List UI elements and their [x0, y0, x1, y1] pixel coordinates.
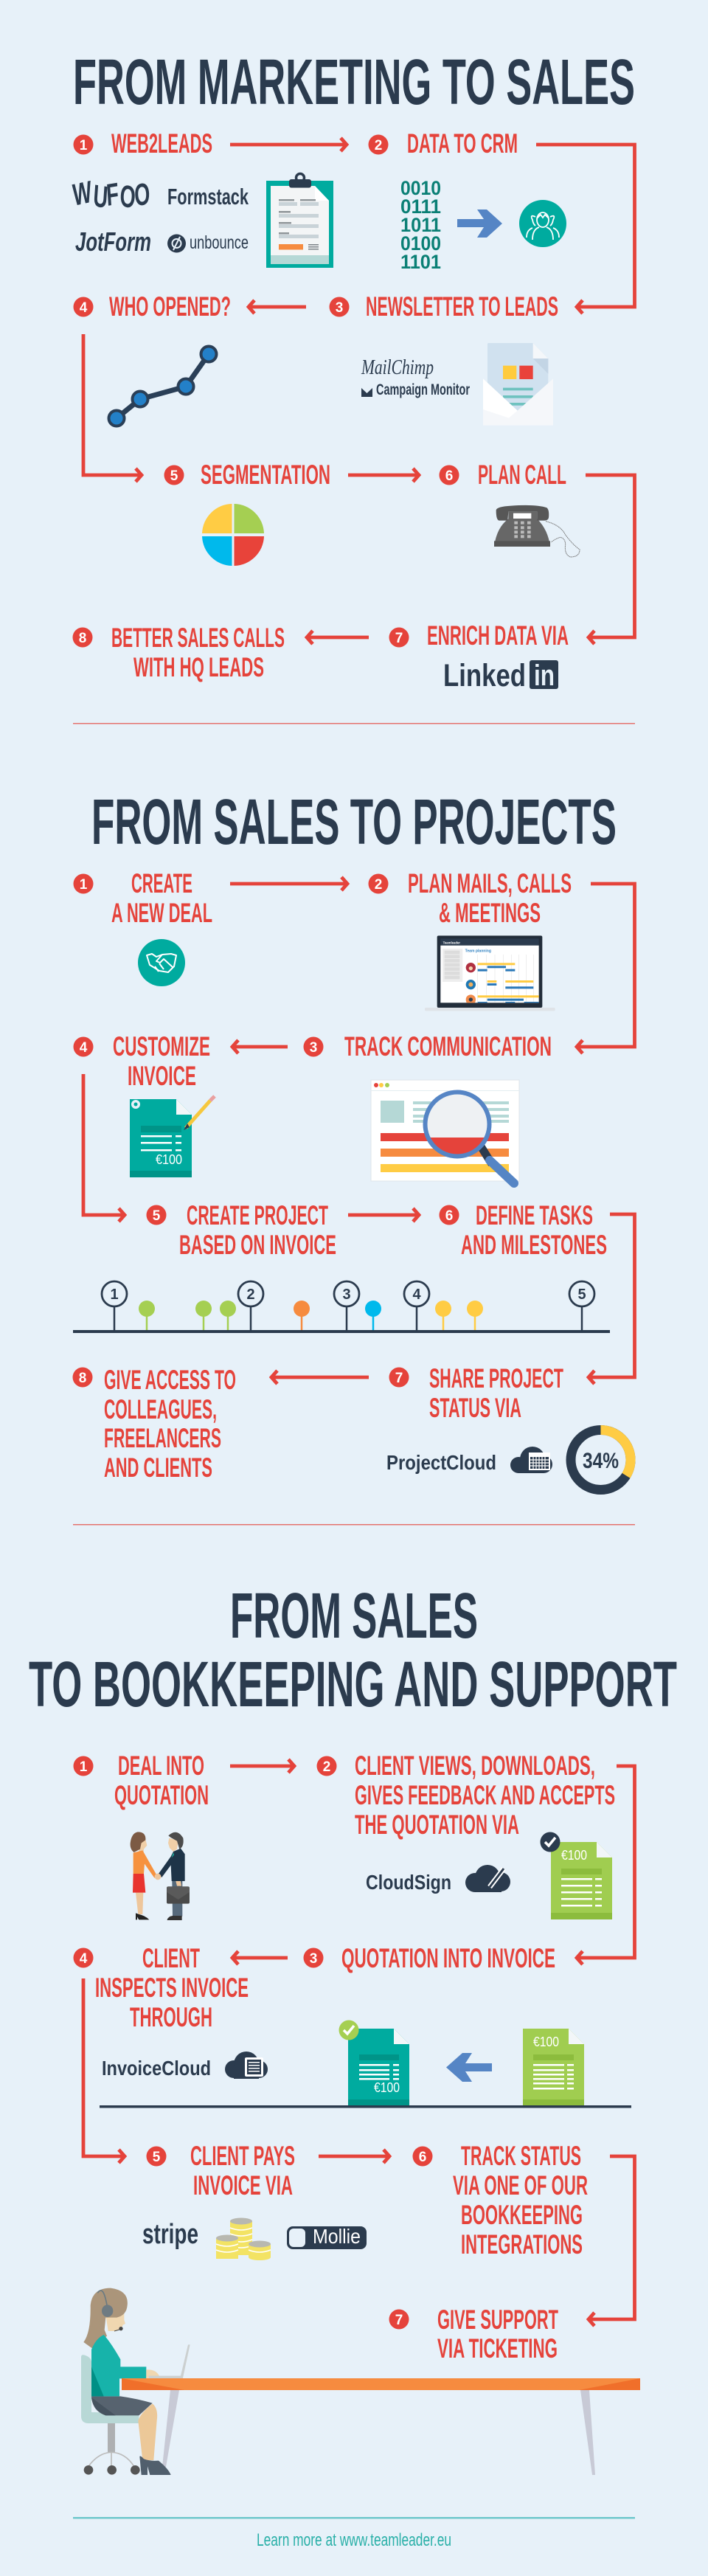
step 7: share project status: 7	[395, 1371, 403, 1386]
icon: green quotation	[523, 2029, 584, 2105]
form tool logos: WUFOO	[70, 176, 151, 214]
logo: projectcloud	[386, 1447, 552, 1474]
logo: mollie toggle	[287, 2225, 367, 2249]
icon: contacts circle	[519, 200, 566, 247]
step 1: create a new deal	[74, 868, 212, 928]
step 8: better sales calls	[72, 622, 285, 682]
step 7: share project status	[389, 1363, 563, 1423]
step 4: customize invoice: CUSTOMIZE	[113, 1031, 210, 1062]
chart: 34 percent donut: 34%	[583, 1449, 619, 1473]
step 6: define tasks: 6	[445, 1208, 453, 1224]
form tool logos	[70, 176, 249, 257]
logo: linkedin: in	[534, 659, 555, 692]
step 5: client pays invoice: 5	[153, 2150, 161, 2165]
step 3: newsletter to leads	[329, 291, 558, 322]
step 5: client pays invoice: CLIENT PAYS	[190, 2140, 295, 2171]
step 1: deal into quotation: DEAL INTO	[118, 1750, 204, 1781]
arrow: step 1 to 2	[230, 877, 347, 890]
arrow: step 5 to 6	[319, 2150, 389, 2163]
chair	[81, 2355, 140, 2475]
arrow: step 3 to 4	[232, 1040, 288, 1053]
title: from sales to bookkeeping and support: FROM SALES	[230, 1580, 478, 1652]
arrow: step 7 to 8	[307, 631, 369, 644]
step 5: create project: BASED ON INVOICE	[179, 1229, 336, 1260]
arrow: step 7 to 8	[271, 1371, 369, 1384]
step 6: define tasks	[440, 1199, 607, 1260]
step 3: quotation into invoice: QUOTATION INTO INVOICE	[341, 1942, 555, 1973]
step 4: customize invoice: 4	[80, 1040, 88, 1056]
icon: telephone	[494, 505, 580, 557]
step 3: newsletter to leads: 3	[336, 300, 343, 316]
timeline chart: 1	[110, 1287, 119, 1303]
step 7: give support: 7	[395, 2313, 403, 2328]
step 7: give support: GIVE SUPPORT	[437, 2304, 558, 2335]
step 5: client pays invoice: INVOICE VIA	[193, 2170, 293, 2201]
step 1: web2leads: 1	[80, 138, 88, 153]
step 2: plan mails calls and meetings: PLAN MAILS, CALLS	[408, 868, 572, 899]
step 2: data to crm: 2	[375, 138, 382, 153]
step 8: give access: COLLEAGUES,	[104, 1393, 217, 1424]
step 6: plan call	[440, 459, 566, 490]
step 4: client inspects invoice: CLIENT	[142, 1942, 200, 1973]
step 8: give access	[72, 1364, 236, 1483]
arrow: step 4 to 5	[83, 1978, 125, 2163]
step 2: client views	[317, 1750, 615, 1840]
arrow: step 4 to 5	[83, 334, 142, 482]
binary digits: 1011	[400, 214, 441, 236]
panel: from marketing to sales	[70, 46, 635, 693]
step 4: client inspects invoice: INSPECTS INVOICE	[95, 1972, 249, 2003]
icon: laptop with team planning: Teamleader	[443, 941, 460, 945]
step 2: client views: THE QUOTATION VIA	[355, 1809, 519, 1840]
step 1: create a new deal: 1	[80, 877, 88, 893]
step 8: give access: FREELANCERS	[104, 1422, 221, 1453]
icon: teal invoice with check	[339, 2020, 409, 2105]
timeline chart: 3	[342, 1287, 351, 1303]
step 2: data to crm: DATA TO CRM	[407, 128, 518, 159]
arrow: step 2 to 3	[577, 884, 634, 1053]
binary digits	[400, 177, 441, 273]
icon: open envelope	[483, 343, 553, 426]
step 6: track status	[413, 2140, 588, 2260]
step 2: plan mails calls and meetings	[369, 868, 572, 928]
arrow: step 5 to 6	[348, 468, 419, 482]
logo: linkedin: Linked	[443, 658, 526, 693]
timeline chart: 4	[412, 1287, 421, 1303]
step 2: data to crm	[369, 128, 518, 159]
timeline chart	[73, 1281, 610, 1333]
step 7: enrich data via: 7	[395, 631, 403, 646]
step 4: customize invoice	[74, 1031, 210, 1091]
step 4: who opened: WHO OPENED?	[109, 291, 231, 322]
step 1: web2leads: WEB2LEADS	[111, 128, 212, 159]
step 1: deal into quotation	[74, 1750, 209, 1810]
arrow: step 3 to 4	[232, 1951, 288, 1964]
logo: invoicecloud: InvoiceCloud	[102, 2057, 211, 2080]
logo: invoicecloud	[102, 2052, 268, 2080]
step 6: track status: BOOKKEEPING	[461, 2199, 583, 2230]
step 1: deal into quotation: QUOTATION	[114, 1779, 209, 1810]
icon: line chart	[109, 347, 217, 426]
step 8: better sales calls: BETTER SALES CALLS	[111, 622, 285, 653]
step 3: newsletter to leads: NEWSLETTER TO LEADS	[366, 291, 558, 322]
icon: coin stacks	[216, 2217, 271, 2260]
step 7: give support	[389, 2304, 558, 2364]
desk leg left	[162, 2390, 179, 2467]
step 5: create project: CREATE PROJECT	[187, 1199, 328, 1230]
step 7: share project status: SHARE PROJECT	[429, 1363, 563, 1393]
step 6: track status: VIA ONE OF OUR	[453, 2170, 588, 2201]
step 3: track communication	[304, 1031, 552, 1062]
step 8: better sales calls: 8	[79, 631, 86, 646]
step 1: create a new deal: CREATE	[131, 868, 192, 899]
step 4: customize invoice: INVOICE	[128, 1060, 196, 1091]
step 6: track status: TRACK STATUS	[461, 2140, 581, 2171]
illustration: support agent at desk	[81, 2288, 640, 2475]
step 2: client views: 2	[323, 1759, 330, 1775]
step 4: client inspects invoice: THROUGH	[130, 2001, 212, 2032]
logo: cloudsign	[366, 1865, 510, 1894]
step 6: define tasks: DEFINE TASKS	[476, 1199, 593, 1230]
icon: green quotation with check: €100	[561, 1848, 587, 1863]
step 4: client inspects invoice	[74, 1942, 249, 2032]
logo: mollie toggle: Mollie	[313, 2225, 361, 2248]
timeline chart: 2	[246, 1287, 255, 1303]
icon: teal invoice with check: €100	[374, 2080, 400, 2095]
step 3: quotation into invoice: 3	[310, 1951, 317, 1967]
arrow: step 6 to 7	[586, 475, 634, 644]
desk leg right	[580, 2390, 595, 2475]
icon: blue arrow left	[446, 2053, 492, 2082]
agent figure	[83, 2288, 190, 2475]
panel: from sales to bookkeeping and support	[29, 1580, 677, 2475]
binary digits: 0100	[400, 232, 441, 255]
icon: teal invoice with pencil	[130, 1096, 215, 1177]
arrow: step 2 to 3	[577, 1766, 634, 1964]
icon: clipboard form	[266, 174, 333, 268]
binary digits: 0111	[400, 195, 441, 218]
step 3: quotation into invoice	[304, 1942, 555, 1973]
step 5: segmentation	[164, 459, 330, 490]
icon: green quotation with check	[540, 1832, 612, 1919]
arrow: step 1 to 2	[230, 1759, 294, 1773]
step 4: who opened: 4	[80, 300, 88, 316]
step 5: create project: 5	[153, 1208, 161, 1224]
form tool logos: unbounce	[190, 232, 249, 253]
arrow: step 1 to 2	[230, 138, 347, 151]
step 7: share project status: STATUS VIA	[429, 1392, 521, 1423]
step 7: enrich data via	[389, 620, 569, 651]
step 8: give access: GIVE ACCESS TO	[104, 1364, 236, 1395]
icon: handshake	[138, 939, 185, 986]
title: from sales to bookkeeping and support	[29, 1580, 677, 1720]
step 4: who opened	[74, 291, 231, 322]
chart: 34 percent donut	[571, 1430, 631, 1490]
icon: document with magnifier	[371, 1080, 519, 1183]
step 2: plan mails calls and meetings: & MEETINGS	[439, 897, 541, 928]
step 6: plan call: 6	[445, 468, 453, 484]
icon: laptop with team planning: Team planning	[465, 949, 491, 954]
form tool logos: Formstack	[167, 184, 249, 210]
step 5: client pays invoice	[146, 2140, 295, 2201]
binary digits: 0010	[400, 177, 441, 199]
arrow: step 4 to 5	[83, 1074, 125, 1222]
step 1: create a new deal: A NEW DEAL	[111, 897, 212, 928]
icon: laptop with team planning	[425, 935, 555, 1011]
footer: learn more: Learn more at www.teamleader.eu	[257, 2530, 451, 2550]
step 8: give access: AND CLIENTS	[104, 1452, 212, 1483]
step 6: plan call: PLAN CALL	[478, 459, 566, 490]
email tool logos: MailChimp	[361, 356, 434, 379]
step 7: enrich data via: ENRICH DATA VIA	[427, 620, 569, 651]
step 4: client inspects invoice: 4	[80, 1951, 88, 1967]
email tool logos	[361, 356, 470, 398]
icon: teal invoice with pencil: €100	[156, 1152, 182, 1167]
icon: blue arrow	[457, 210, 502, 238]
arrow: step 2 to 3	[536, 145, 634, 314]
step 5: create project	[146, 1199, 336, 1260]
step 5: segmentation: SEGMENTATION	[201, 459, 330, 490]
step 3: track communication: 3	[310, 1040, 317, 1056]
panel: from sales to projects	[72, 786, 634, 1490]
arrow: step 6 to 7	[589, 1214, 634, 1384]
binary digits: 1101	[400, 251, 441, 273]
desk top	[122, 2378, 640, 2390]
step 6: track status: 6	[419, 2150, 426, 2165]
arrow: step 5 to 6	[348, 1208, 419, 1222]
timeline chart: 5	[577, 1287, 586, 1303]
icon: green quotation: €100	[533, 2035, 559, 2049]
step 8: give access: 8	[79, 1371, 86, 1386]
icon: business handshake couple	[131, 1832, 190, 1920]
arrow: step 3 to 4	[249, 300, 306, 314]
email tool logos: Campaign Monitor	[376, 381, 470, 398]
logo: stripe: stripe	[142, 2219, 198, 2250]
icon: segmentation pie	[202, 504, 264, 566]
step 1: web2leads	[74, 128, 212, 159]
step 7: give support: VIA TICKETING	[437, 2333, 558, 2364]
form tool logos: JotForm	[75, 226, 151, 257]
logo: projectcloud: ProjectCloud	[386, 1451, 496, 1474]
step 6: track status: INTEGRATIONS	[461, 2229, 583, 2260]
logo: cloudsign: CloudSign	[366, 1871, 451, 1894]
step 5: segmentation: 5	[170, 468, 178, 484]
step 1: deal into quotation: 1	[80, 1759, 88, 1775]
step 8: better sales calls: WITH HQ LEADS	[133, 651, 264, 682]
step 2: plan mails calls and meetings: 2	[375, 877, 382, 893]
step 6: define tasks: AND MILESTONES	[461, 1229, 607, 1260]
arrow: step 6 to 7	[589, 2156, 634, 2326]
step 3: track communication: TRACK COMMUNICATION	[344, 1031, 552, 1062]
